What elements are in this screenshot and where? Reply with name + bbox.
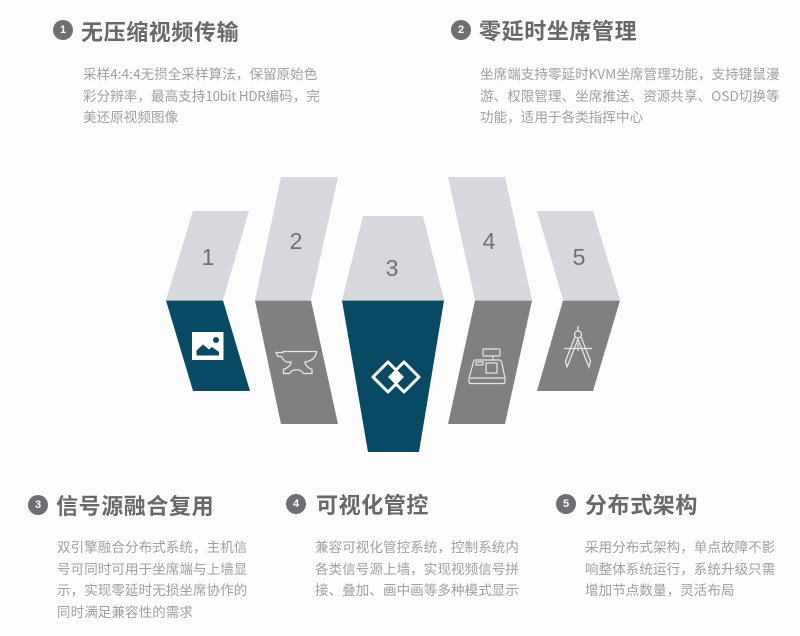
column 2 <box>255 177 338 424</box>
body text 5: 响整体系统运行，系统升级只需 <box>585 558 775 578</box>
body text 3 <box>57 536 247 621</box>
heading 3: 信号源融合复用 <box>56 489 214 521</box>
icon: anvil <box>276 352 316 374</box>
icon: cash register <box>469 349 505 384</box>
icon: drafting compass <box>564 326 592 367</box>
column 3 <box>342 216 444 452</box>
column 1 <box>166 211 250 391</box>
badge 3 <box>28 495 48 515</box>
column 4: 4 <box>483 228 496 254</box>
section 3: signal source fusion <box>28 489 247 621</box>
body text 1 <box>83 63 320 126</box>
heading 5: 分布式架构 <box>585 488 698 520</box>
icon: overlapping diamonds <box>373 362 419 392</box>
badge 4 <box>286 494 306 514</box>
body text 2: 游、权限管理、坐席推送、资源共享、OSD切换等 <box>480 85 780 105</box>
body text 3: 示，实现零延时无损坐席协作的 <box>57 579 247 599</box>
column 3: 3 <box>386 255 398 281</box>
badge 1 <box>53 20 73 40</box>
badge 3: 3 <box>35 499 41 511</box>
heading 4: 可视化管控 <box>316 488 429 520</box>
body text 5: 增加节点数量，灵活布局 <box>585 579 735 599</box>
column 4 <box>448 177 532 424</box>
body text 1: 美还原视频图像 <box>83 106 178 126</box>
column 2: 2 <box>290 228 302 254</box>
section 4: visual control <box>286 488 519 599</box>
badge 5 <box>556 494 576 514</box>
body text 2 <box>480 63 780 126</box>
body text 4 <box>315 536 519 599</box>
badge 1: 1 <box>60 24 66 36</box>
body text 4: 兼容可视化管控系统，控制系统内 <box>315 536 519 556</box>
body text 5 <box>585 536 775 599</box>
badge 5: 5 <box>563 498 569 510</box>
heading 2: 零延时坐席管理 <box>479 14 637 46</box>
section 2: zero latency seat management <box>451 14 780 126</box>
body text 1: 采样4:4:4无损全采样算法，保留原始色 <box>83 63 317 83</box>
section 5: distributed architecture <box>556 488 775 599</box>
column 1: 1 <box>202 244 214 270</box>
icon: picture <box>192 332 224 360</box>
body text 1: 彩分辨率，最高支持10bit HDR编码，完 <box>83 85 320 105</box>
column 5 <box>537 211 620 391</box>
body text 4: 接、叠加、画中画等多种模式显示 <box>315 579 519 599</box>
body text 2: 功能，适用于各类指挥中心 <box>480 106 643 126</box>
section 1: uncompressed video <box>53 15 320 126</box>
column 5: 5 <box>573 244 585 270</box>
body text 4: 各类信号源上墙，实现视频信号拼 <box>315 558 519 578</box>
body text 5: 采用分布式架构，单点故障不影 <box>585 536 775 556</box>
body text 3: 号可同时可用于坐席端与上墙显 <box>57 558 247 578</box>
badge 2 <box>451 20 471 40</box>
body text 2: 坐席端支持零延时KVM坐席管理功能，支持键鼠漫 <box>480 63 780 83</box>
body text 3: 双引擎融合分布式系统，主机信 <box>57 536 247 556</box>
badge 2: 2 <box>458 24 464 36</box>
badge 4: 4 <box>293 498 299 510</box>
body text 3: 同时满足兼容性的需求 <box>57 601 193 621</box>
heading 1: 无压缩视频传输 <box>81 15 239 47</box>
